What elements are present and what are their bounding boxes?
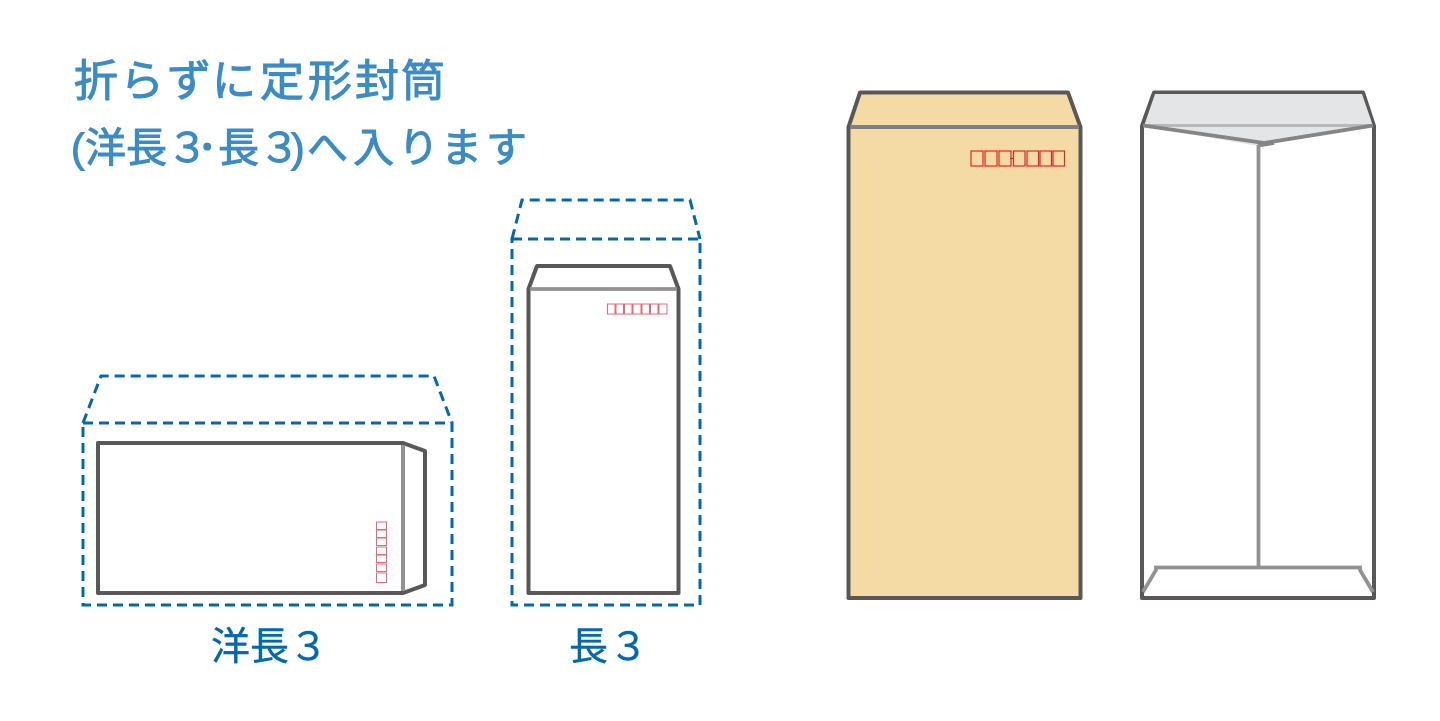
bottom flap <box>1143 568 1373 592</box>
panel: white envelope back <box>1142 92 1374 598</box>
postal code boxes <box>608 304 667 314</box>
envelope body: yonaga 3 <box>98 443 425 593</box>
title line 1: 折らずに定形封筒 <box>74 57 445 106</box>
label: naga 3: 長３ <box>569 626 648 669</box>
envelope body: kraft <box>848 92 1080 598</box>
title <box>71 57 527 171</box>
panel: naga 3 envelope <box>512 200 700 669</box>
center seam <box>1257 145 1260 568</box>
flap fold line <box>530 287 677 291</box>
dashed outline: yonaga 3 <box>83 376 452 605</box>
title line 2: (洋長３･長３)へ入ります <box>71 125 527 171</box>
flap fold line <box>850 125 1079 129</box>
postal code boxes <box>376 522 386 582</box>
panel: yonaga 3 envelope <box>83 376 452 669</box>
envelope body: naga 3 <box>528 266 678 593</box>
envelope body: back <box>1142 92 1374 598</box>
label: yonaga 3: 洋長３ <box>211 626 328 669</box>
panel: kraft envelope front <box>848 92 1080 598</box>
dashed outline: naga 3 <box>512 200 700 605</box>
flap fold lines <box>1143 124 1373 127</box>
open flap <box>1144 94 1373 146</box>
flap fold line <box>401 445 405 591</box>
postal code boxes <box>971 151 1064 166</box>
